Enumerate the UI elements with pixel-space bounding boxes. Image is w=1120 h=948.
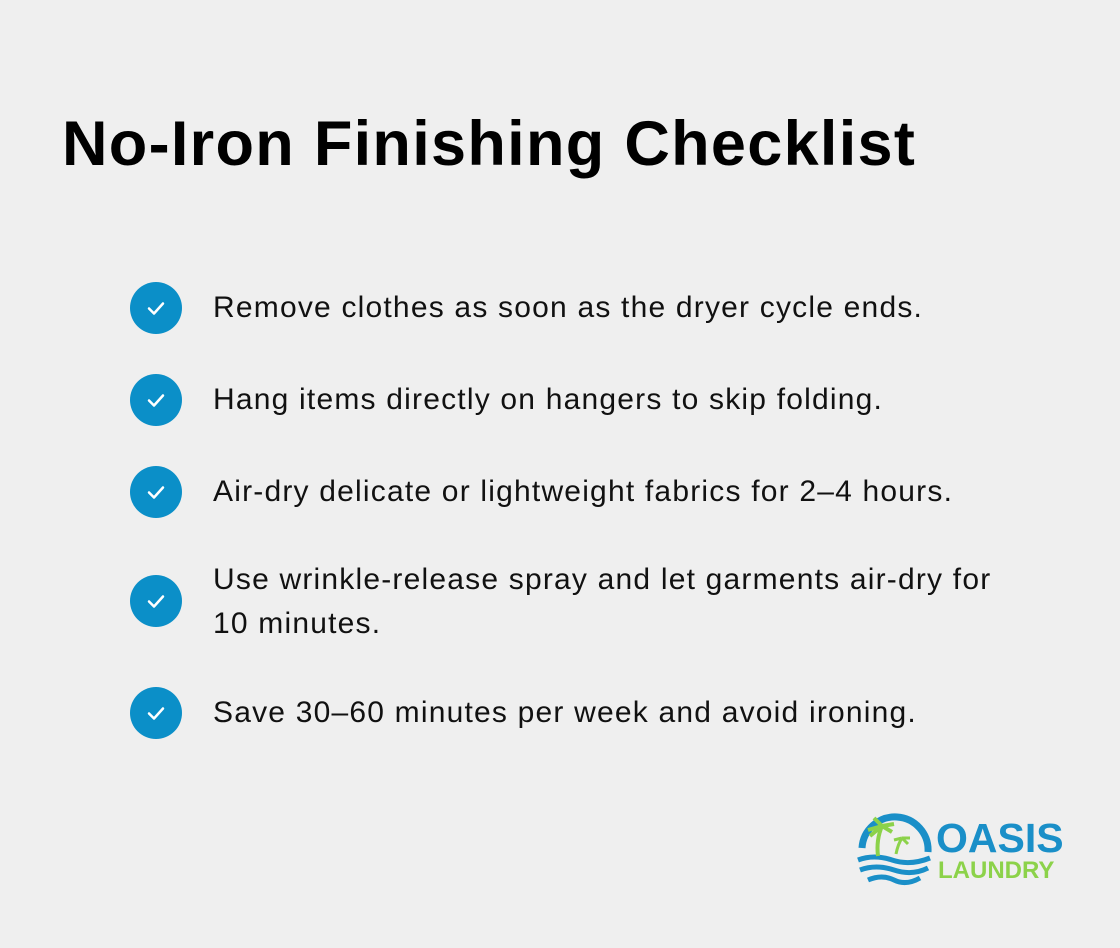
item 4 — [130, 563, 991, 640]
icon: check — [130, 575, 182, 627]
item 5: Save 30–60 minutes per week and avoid ironing. — [213, 696, 917, 729]
item 5 — [130, 687, 917, 739]
logo text: OASIS — [936, 815, 1064, 861]
item 2 — [130, 374, 883, 426]
item 4: Use wrinkle-release spray and let garments air-dry for — [213, 563, 991, 596]
icon: check — [130, 687, 182, 739]
item 1 — [130, 282, 923, 334]
logo icon — [857, 813, 932, 886]
icon: check — [130, 282, 182, 334]
item 4: 10 minutes. — [213, 607, 381, 640]
item 1: Remove clothes as soon as the dryer cycle ends. — [213, 291, 923, 324]
logo — [857, 813, 1064, 886]
title: No-Iron Finishing Checklist — [62, 109, 916, 179]
item 2: Hang items directly on hangers to skip folding. — [213, 383, 883, 416]
icon: check — [130, 374, 182, 426]
item 3 — [130, 466, 953, 518]
logo: LAUNDRY — [938, 857, 1054, 884]
icon: check — [130, 466, 182, 518]
item 3: Air-dry delicate or lightweight fabrics for 2–4 hours. — [213, 475, 953, 508]
